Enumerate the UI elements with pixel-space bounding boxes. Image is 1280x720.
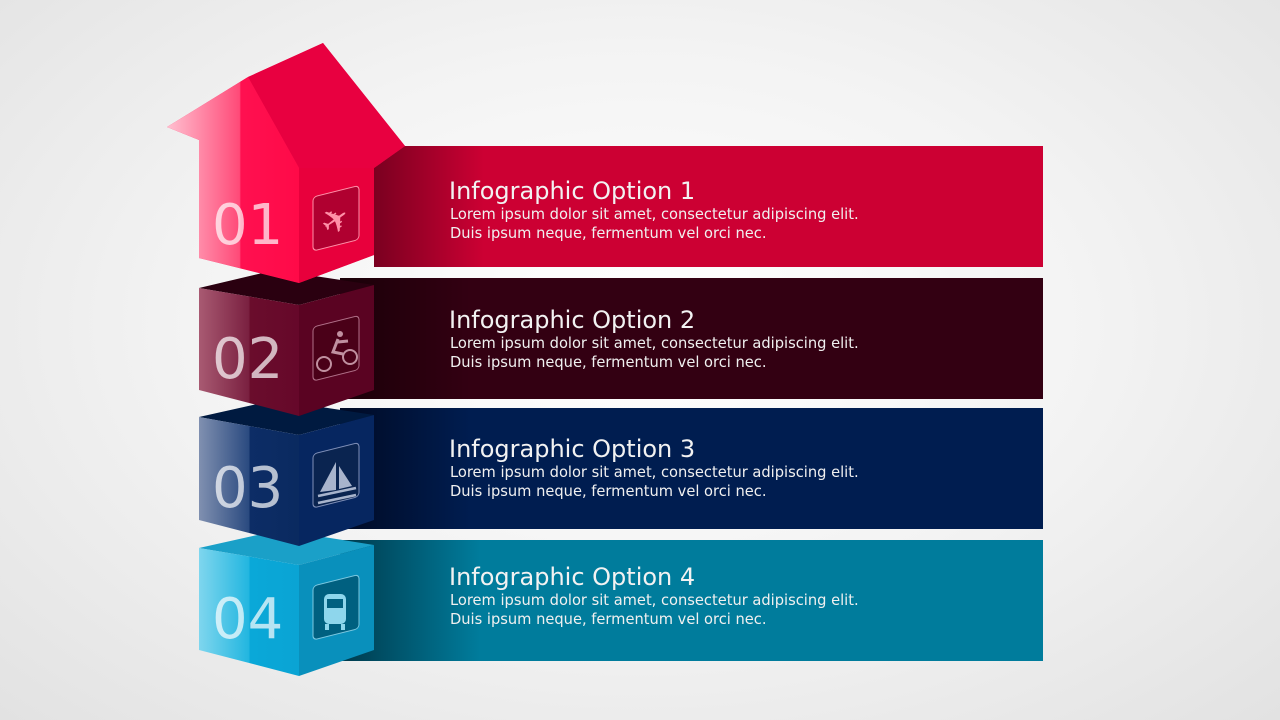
cube 1 arrow: 01 (212, 193, 283, 258)
band 4 text: Duis ipsum neque, fermentum vel orci nec. (450, 611, 766, 628)
icon: sailboat (313, 442, 359, 508)
cube 2 (199, 270, 374, 416)
band 1 text: Infographic Option 1 (449, 177, 695, 205)
band 3 text: Duis ipsum neque, fermentum vel orci nec. (450, 483, 766, 500)
cube 3: 03 (212, 456, 283, 521)
icon: airplane: ✈ (313, 196, 359, 246)
band 4 text: Infographic Option 4 (449, 563, 695, 591)
band 1 (374, 146, 1043, 267)
band 2 text (449, 306, 859, 371)
band 3 text: Lorem ipsum dolor sit amet, consectetur adipiscing elit. (450, 464, 859, 481)
band 1 text (449, 177, 859, 242)
cube 1 arrow (167, 43, 405, 283)
band 2 text: Lorem ipsum dolor sit amet, consectetur adipiscing elit. (450, 335, 859, 352)
cube 4 (199, 530, 374, 676)
band 1 text: Lorem ipsum dolor sit amet, consectetur adipiscing elit. (450, 206, 859, 223)
band 2 text: Infographic Option 2 (449, 306, 695, 334)
cube 4: 04 (212, 587, 283, 652)
band 3 text: Infographic Option 3 (449, 435, 695, 463)
icon: bicycle (313, 315, 359, 381)
icon: bus (313, 574, 359, 640)
band 4 (340, 540, 1043, 661)
band 4 text (449, 563, 859, 628)
band 2 (340, 278, 1043, 399)
band 1 text: Duis ipsum neque, fermentum vel orci nec. (450, 225, 766, 242)
cube 3 (199, 400, 374, 546)
band 4 text: Lorem ipsum dolor sit amet, consectetur adipiscing elit. (450, 592, 859, 609)
band 3 text (449, 435, 859, 500)
band 3 (340, 408, 1043, 529)
cube 2: 02 (212, 327, 283, 392)
band 2 text: Duis ipsum neque, fermentum vel orci nec. (450, 354, 766, 371)
